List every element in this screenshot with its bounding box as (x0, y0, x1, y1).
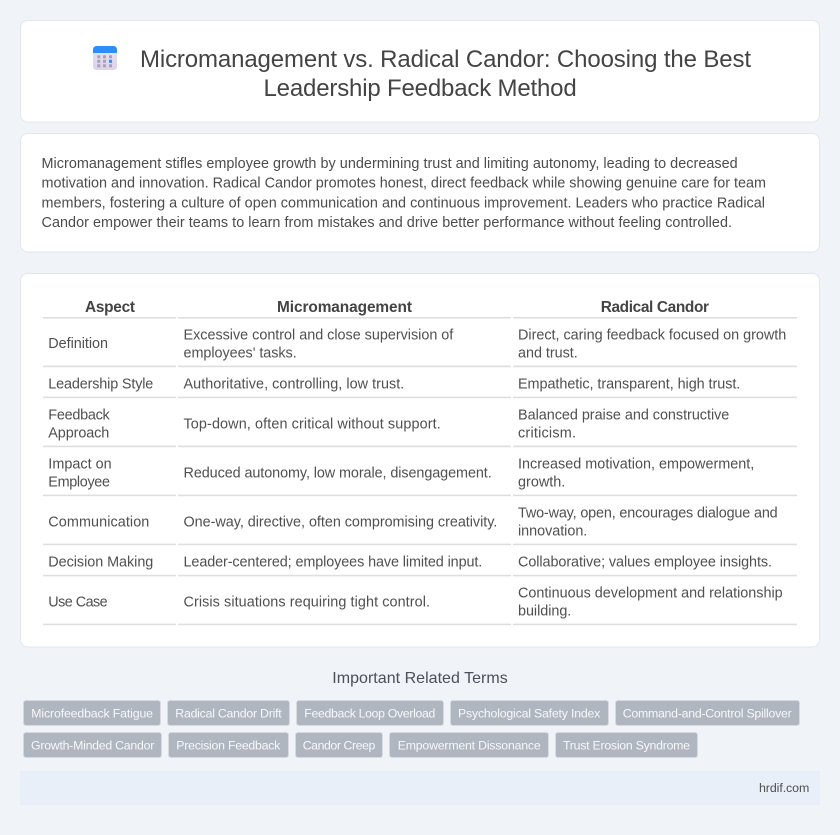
footer source text: hrdif.com (759, 781, 809, 795)
panel: header (20, 20, 820, 122)
row: communication: innovation. (518, 523, 587, 539)
table header: Aspect (85, 299, 135, 316)
row: impact on employee: Increased motivation, empowerment, (518, 456, 754, 472)
tag: Empowerment Dissonance (390, 732, 548, 758)
tag: Empowerment Dissonance: Empowerment Dissonance (398, 738, 541, 752)
row: definition: employees' tasks. (184, 345, 297, 361)
tag: Precision Feedback: Precision Feedback (176, 738, 281, 752)
row: definition: Direct, caring feedback focused on growth (518, 327, 786, 343)
tag: Psychological Safety Index: Psychological Safety Index (458, 706, 601, 720)
tag: Command-and-Control Spillover (616, 700, 800, 726)
tag: Psychological Safety Index (450, 700, 608, 726)
row: use case: Use Case (48, 594, 108, 610)
intro text: members, fostering a culture of open communication and continuous improvement. Leaders who practice Radical (42, 195, 765, 211)
intro text: Micromanagement stifles employee growth by undermining trust and limiting autonomy, leading to decreased (42, 156, 738, 172)
row: use case: Crisis situations requiring tight control. (184, 594, 430, 610)
row: impact on employee: growth. (518, 474, 565, 490)
title (140, 46, 751, 102)
row: impact on employee: Employee (48, 474, 110, 490)
row: feedback approach: Feedback (48, 407, 110, 423)
row: definition: and trust. (518, 345, 578, 361)
panel: introduction (20, 134, 820, 252)
intro text: Candor empower their teams to learn from mistakes and drive better performance without feeling controlled. (42, 215, 732, 231)
tag: Microfeedback Fatigue (24, 700, 160, 726)
row: leadership style: Leadership Style (48, 376, 153, 392)
row: feedback approach: Approach (48, 425, 109, 441)
row: use case (48, 585, 783, 619)
row: feedback approach: Balanced praise and constructive (518, 407, 729, 423)
row: definition: Excessive control and close supervision of (184, 327, 454, 343)
tag list (24, 700, 800, 758)
row: communication: One-way, directive, often compromising creativity. (184, 514, 497, 530)
footer (20, 771, 820, 805)
row: impact on employee: Impact on (48, 456, 112, 472)
tag: Feedback Loop Overload: Feedback Loop Overload (304, 706, 435, 720)
row: definition (48, 327, 786, 361)
row: leadership style (48, 376, 740, 392)
row: feedback approach (48, 407, 729, 441)
row: decision making: Leader-centered; employees have limited input. (184, 554, 482, 570)
tag: Candor Creep (296, 732, 382, 758)
row: decision making (48, 554, 772, 570)
row: communication: Two-way, open, encourages dialogue and (518, 505, 778, 521)
tag: Radical Candor Drift (168, 700, 290, 726)
table header (85, 299, 709, 316)
tag: Microfeedback Fatigue: Microfeedback Fatigue (31, 706, 153, 720)
row: communication (48, 505, 778, 539)
row: decision making: Decision Making (48, 554, 153, 570)
tag: Radical Candor Drift: Radical Candor Drift (175, 706, 282, 720)
title: Leadership Feedback Method (264, 75, 577, 102)
tag: Command-and-Control Spillover: Command-and-Control Spillover (623, 706, 792, 720)
tag: Growth-Minded Candor: Growth-Minded Candor (31, 738, 154, 752)
panel: comparison table (20, 274, 820, 647)
row: impact on employee (48, 456, 754, 490)
row: feedback approach: criticism. (518, 425, 576, 441)
intro text (42, 156, 766, 231)
row: leadership style: Authoritative, controlling, low trust. (184, 376, 404, 392)
table header: Micromanagement (277, 299, 412, 316)
row: feedback approach: Top-down, often critical without support. (184, 416, 441, 432)
heading: important related terms: Important Related Terms (332, 670, 508, 687)
row: leadership style: Empathetic, transparent, high trust. (518, 376, 740, 392)
icon: calendar (93, 46, 117, 70)
tag: Feedback Loop Overload (296, 700, 444, 726)
intro text: motivation and innovation. Radical Candor promotes honest, direct feedback while showing genuine care for team (42, 176, 766, 192)
row: use case: building. (518, 603, 571, 619)
tag: Candor Creep: Candor Creep (303, 738, 375, 752)
tag: Precision Feedback (168, 732, 288, 758)
tag: Growth-Minded Candor (24, 732, 162, 758)
tag: Trust Erosion Syndrome: Trust Erosion Syndrome (563, 738, 690, 752)
row: decision making: Collaborative; values employee insights. (518, 554, 772, 570)
table header: Radical Candor (601, 299, 709, 316)
tag: Trust Erosion Syndrome (556, 732, 698, 758)
row: definition: Definition (48, 336, 108, 352)
row: communication: Communication (48, 514, 149, 530)
row: impact on employee: Reduced autonomy, low morale, disengagement. (184, 465, 492, 481)
row: use case: Continuous development and relationship (518, 585, 783, 601)
title: Micromanagement vs. Radical Candor: Choosing the Best (140, 46, 751, 73)
